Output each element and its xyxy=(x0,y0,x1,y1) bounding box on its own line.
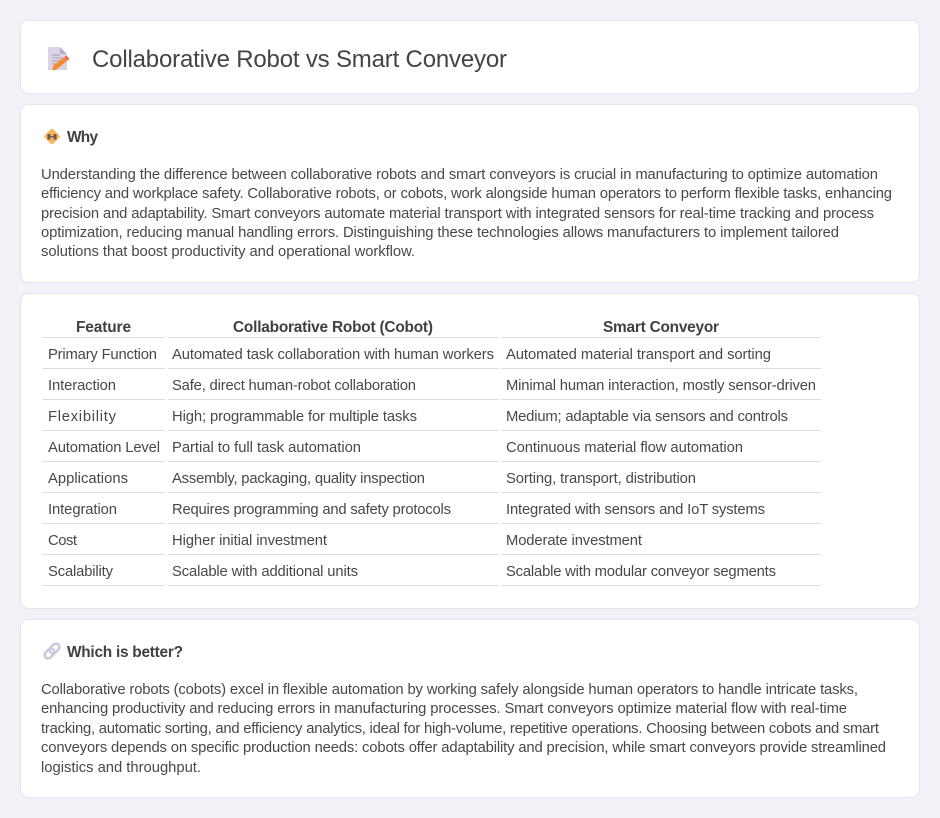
row: integration: Requires programming and safety protocols xyxy=(172,502,451,518)
row: scalability: Scalability xyxy=(48,564,114,580)
table header: Smart Conveyor xyxy=(603,319,719,336)
row: interaction: Minimal human interaction, mostly sensor-driven xyxy=(506,378,816,394)
heading: why: Why xyxy=(67,129,98,146)
row: automation level: Automation Level xyxy=(48,440,160,456)
row: scalability: Scalable with modular conveyor segments xyxy=(506,564,776,580)
row: flexibility: Medium; adaptable via sensors and controls xyxy=(506,409,788,425)
text block: which is better body xyxy=(41,682,886,776)
row: flexibility: High; programmable for multiple tasks xyxy=(172,409,417,425)
row: primary function: Automated task collaboration with human workers xyxy=(172,347,494,363)
row: integration xyxy=(42,502,821,524)
row: scalability xyxy=(42,564,821,586)
row: primary function: Primary Function xyxy=(48,347,157,363)
row: automation level xyxy=(42,440,821,462)
text block: which is better body: logistics and throughput. xyxy=(41,760,201,776)
text block: which is better body: conveyors depends on specific production needs: cobots offer adaptability and precision, while smart conveyors provide streamlined xyxy=(41,740,886,756)
text block: why body: precision and adaptability. Smart conveyors automate material transport with integrated sensors for real-time tracking and process xyxy=(41,206,874,222)
panel: comparison table xyxy=(20,294,920,608)
table header xyxy=(42,319,821,338)
table header: Feature xyxy=(76,319,131,336)
row: interaction xyxy=(42,378,821,400)
row: applications: Assembly, packaging, quality inspection xyxy=(172,471,425,487)
text block: which is better body: tracking, automatic sorting, and efficiency analytics, ideal for high-volume, repetitive operations. Choosing between cobots and smart xyxy=(41,721,879,737)
row: automation level: Continuous material flow automation xyxy=(506,440,743,456)
heading: which is better: Which is better? xyxy=(67,644,183,661)
text block: why body xyxy=(41,167,892,260)
row: interaction: Safe, direct human-robot collaboration xyxy=(172,378,416,394)
text block: which is better body: enhancing productivity and reducing errors in manufacturing processes. Smart conveyors optimize material flow with real-time xyxy=(41,701,847,717)
row: cost: Higher initial investment xyxy=(172,533,327,549)
row: scalability: Scalable with additional units xyxy=(172,564,358,580)
row: applications: Applications xyxy=(48,471,128,487)
text block: why body: solutions that boost productivity and operational workflow. xyxy=(41,244,415,260)
row: applications xyxy=(42,471,821,493)
icon: orange diamond sign xyxy=(44,128,60,145)
text block: why body: Understanding the difference between collaborative robots and smart conveyors is crucial in manufacturing to optimize automation xyxy=(41,167,878,183)
row: cost: Cost xyxy=(48,533,77,549)
row: flexibility: Flexibility xyxy=(48,409,117,425)
icon: chain link xyxy=(43,642,61,660)
row: primary function: Automated material transport and sorting xyxy=(506,347,771,363)
panel: why xyxy=(20,104,920,282)
row: integration: Integration xyxy=(48,502,117,518)
text block: why body: optimization, reducing manual handling errors. Distinguishing these technologies allows manufacturers to implement tailored xyxy=(41,225,839,241)
row: flexibility xyxy=(42,409,821,431)
table header: Collaborative Robot (Cobot) xyxy=(233,319,433,336)
row: cost: Moderate investment xyxy=(506,533,642,549)
title: Collaborative Robot vs Smart Conveyor xyxy=(92,46,507,73)
text block: which is better body: Collaborative robots (cobots) excel in flexible automation by working safely alongside human operators to handle intricate tasks, xyxy=(41,682,858,698)
text block: why body: efficiency and workplace safety. Collaborative robots, or cobots, work alongside human operators to perform flexible tasks, enhancing xyxy=(41,186,892,202)
row: applications: Sorting, transport, distribution xyxy=(506,471,696,487)
panel: which is better xyxy=(20,620,920,798)
row: automation level: Partial to full task automation xyxy=(172,440,361,456)
row: interaction: Interaction xyxy=(48,378,116,394)
row: primary function xyxy=(42,347,821,369)
row: cost xyxy=(42,533,821,555)
row: integration: Integrated with sensors and IoT systems xyxy=(506,502,765,518)
panel: title card xyxy=(20,20,920,94)
icon: document with pencil xyxy=(48,47,70,70)
